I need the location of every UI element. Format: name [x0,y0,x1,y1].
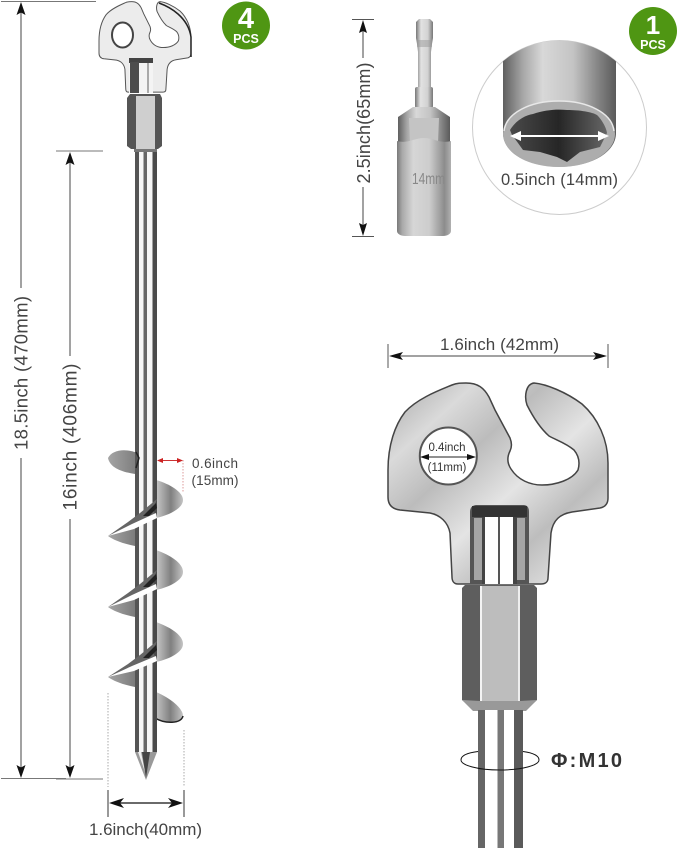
dimension: 16inch shaft length: 16inch (406mm) [60,364,82,510]
socket body [397,138,451,236]
hex bit [415,19,433,108]
hole dimension [420,442,476,474]
auger flight lobes behind shaft [108,450,183,722]
hex collar [127,94,162,152]
dimension: 0.6inch flight width: 0.6inch [192,456,238,471]
diameter label: Φ:M10 [551,750,622,772]
dimension: 18.5inch overall length [1,2,96,778]
measure arrow [510,131,609,141]
socket shoulder [398,107,450,143]
shaft stripes [135,150,157,780]
callout circle: socket opening [472,30,646,214]
socket rim [503,101,615,167]
shoulder facet [409,118,439,142]
badge: 1 PCS: 1 [646,10,660,40]
hole dimension: 0.4inch [428,442,466,454]
measure label: 0.5inch (14mm) [501,171,618,189]
dimension: 1.6inch auger diameter: 1.6inch(40mm) [89,820,202,839]
dimension: 18.5inch overall length: 18.5inch (470mm) [10,296,32,450]
slot with shaft end [470,505,529,584]
dimension: 2.5inch socket length [352,20,374,236]
hex collar detail [462,585,537,711]
socket barrel [503,30,616,167]
socket adapter [397,19,451,236]
mounting hole [420,428,477,484]
dimension: 16inch shaft length [56,151,103,779]
screw anchor: full view [99,2,191,780]
badge: 1 PCS [629,7,677,55]
badge: 4 PCS [222,2,270,50]
diameter ring [461,752,539,770]
dimension: 1.6inch auger diameter [89,693,202,839]
key plate detail [388,383,608,584]
key plate [99,2,191,93]
badge: 4 PCS: 4 [238,3,254,35]
dimension: 2.5inch socket length: 2.5inch(65mm) [354,62,374,184]
dimension: 0.6inch flight width: (15mm) [192,473,238,488]
hex opening [510,110,607,162]
plate outline [388,383,608,584]
hole dimension: (11mm) [428,462,467,474]
dimension: 1.6inch key width: 1.6inch (42mm) [440,335,559,354]
dimension: 1.6inch key width [388,335,608,368]
dimension: 0.6inch flight width [157,456,238,493]
threaded shaft detail [478,710,523,848]
auger crossing bands over shaft [108,452,157,677]
badge: 4 PCS: PCS [233,32,259,46]
engraved size: 14mm [412,171,445,188]
badge: 1 PCS: PCS [640,38,666,52]
